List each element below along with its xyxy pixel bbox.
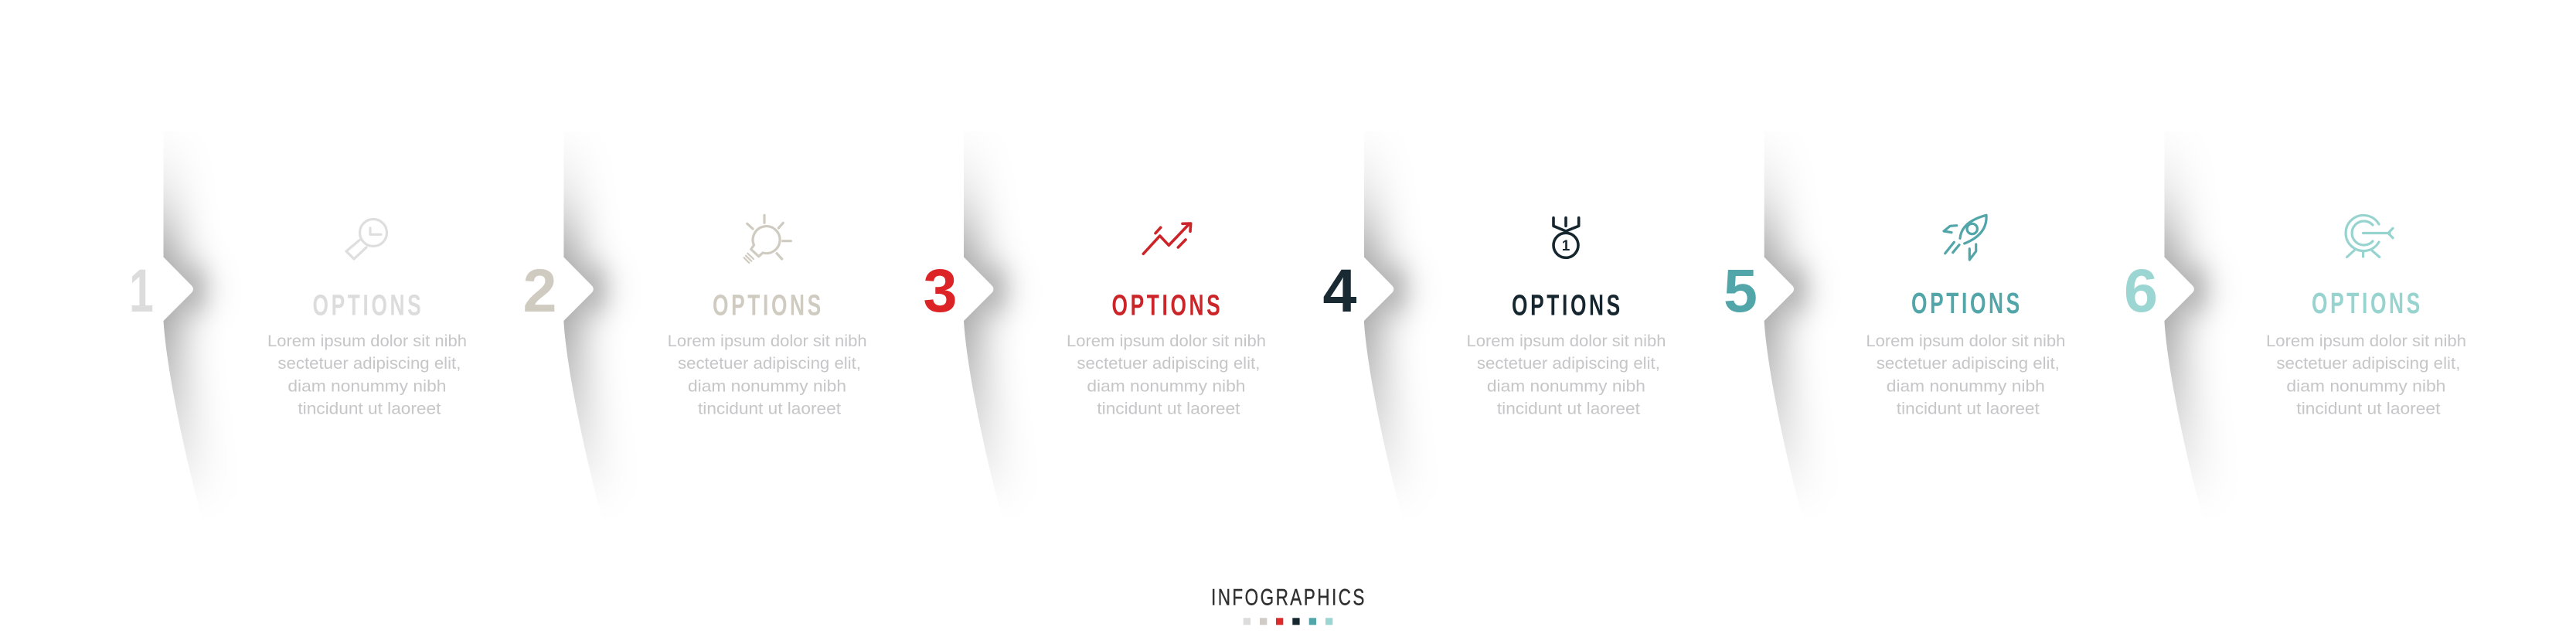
body text 1: tincidunt ut laoreet — [298, 400, 441, 418]
shadow fold 2 — [563, 158, 622, 481]
body text 4: sectetuer adipiscing elit, — [1477, 355, 1660, 373]
body text 6: tincidunt ut laoreet — [2296, 400, 2441, 418]
body text 2: tincidunt ut laoreet — [698, 400, 841, 418]
body text 1 — [267, 332, 467, 418]
body text 6: sectetuer adipiscing elit, — [2276, 355, 2460, 373]
heading 1: OPTIONS — [312, 289, 424, 322]
colour legend squares — [1244, 618, 1332, 625]
icon: target with arrow — [2346, 215, 2393, 257]
icon: medal: 1 — [1562, 238, 1570, 254]
shadow fold 4 — [1363, 158, 1422, 481]
panel: step 4 — [1323, 158, 1665, 481]
body text 6: Lorem ipsum dolor sit nibh — [2266, 332, 2466, 350]
body text 5: Lorem ipsum dolor sit nibh — [1866, 332, 2065, 350]
body text 3: Lorem ipsum dolor sit nibh — [1067, 332, 1266, 350]
heading 6: OPTIONS — [2312, 287, 2423, 319]
body text 5: diam nonummy nibh — [1887, 377, 2045, 396]
number 3: 3 — [924, 256, 957, 325]
footer title: INFOGRAPHICS — [1211, 584, 1366, 610]
body text 4: diam nonummy nibh — [1487, 377, 1645, 396]
body text 6 — [2266, 332, 2466, 418]
heading 4: OPTIONS — [1512, 289, 1623, 322]
body text 5 — [1866, 332, 2065, 418]
body text 4: Lorem ipsum dolor sit nibh — [1467, 332, 1666, 350]
panel: step 3 — [924, 158, 1264, 481]
number 5: 5 — [1724, 256, 1758, 325]
body text 4: tincidunt ut laoreet — [1497, 400, 1640, 418]
infographic canvas — [131, 158, 2465, 625]
panel: step 6 — [2125, 158, 2465, 481]
body text 3 — [1067, 332, 1266, 418]
body text 3: sectetuer adipiscing elit, — [1077, 355, 1260, 373]
panel: step 1 — [131, 158, 465, 481]
shadow fold 3 — [964, 158, 1023, 481]
number 1: 1 — [129, 257, 154, 325]
heading 3: OPTIONS — [1111, 289, 1223, 322]
body text 3: diam nonummy nibh — [1087, 377, 1245, 396]
shadow fold 1 — [164, 158, 223, 481]
heading 2: OPTIONS — [713, 289, 824, 322]
body text 2: sectetuer adipiscing elit, — [678, 355, 861, 373]
icon: rising chart arrow — [1143, 223, 1191, 254]
body text 1: Lorem ipsum dolor sit nibh — [267, 332, 467, 350]
icon: magnifier with clock — [346, 220, 386, 259]
body text 4 — [1467, 332, 1666, 418]
body text 2: diam nonummy nibh — [688, 377, 846, 396]
body text 1: diam nonummy nibh — [288, 377, 446, 396]
body text 5: tincidunt ut laoreet — [1897, 400, 2040, 418]
body text 3: tincidunt ut laoreet — [1097, 400, 1240, 418]
panel: step 5 — [1725, 158, 2064, 481]
body text 5: sectetuer adipiscing elit, — [1877, 355, 2060, 373]
number 6: 6 — [2124, 256, 2158, 325]
icon: rocket — [1944, 215, 1986, 260]
heading 5: OPTIONS — [1911, 287, 2023, 319]
shadow fold 6 — [2164, 158, 2223, 481]
body text 6: diam nonummy nibh — [2286, 377, 2445, 396]
icon: medal — [1553, 218, 1579, 257]
panel: step 2 — [525, 158, 866, 481]
number 4: 4 — [1323, 256, 1357, 325]
body text 2 — [668, 332, 867, 418]
icon: light bulb — [744, 215, 791, 263]
shadow fold 5 — [1764, 158, 1822, 481]
number 2: 2 — [523, 256, 556, 325]
body text 2: Lorem ipsum dolor sit nibh — [668, 332, 867, 350]
body text 1: sectetuer adipiscing elit, — [277, 355, 461, 373]
